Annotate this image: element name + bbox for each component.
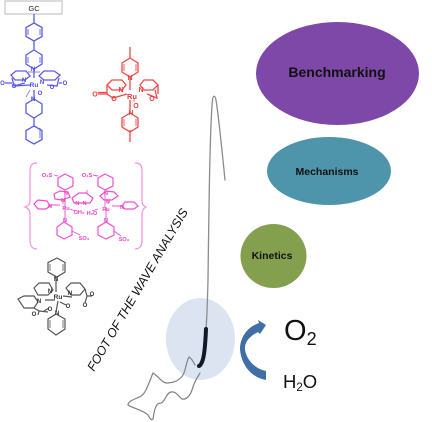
molecule: blue ruthenium complex: O <box>50 85 55 91</box>
molecule: pink dinuclear ruthenium complex: N <box>106 199 110 205</box>
molecule: pink dinuclear ruthenium complex: N <box>61 198 65 204</box>
molecule: pink dinuclear ruthenium complex: H₂O <box>87 211 98 217</box>
molecule: pink dinuclear ruthenium complex: N <box>64 191 68 197</box>
molecule: black ruthenium complex: O <box>66 304 71 310</box>
molecule: blue ruthenium complex: O <box>38 91 43 97</box>
molecule: red ruthenium complex: O <box>92 92 98 98</box>
molecule: blue ruthenium complex: O <box>12 84 17 90</box>
molecule: black ruthenium complex: O <box>48 307 53 313</box>
molecule: pink dinuclear ruthenium complex <box>25 163 146 249</box>
molecule: pink dinuclear ruthenium complex: N <box>48 204 52 210</box>
arrow: water to oxygen <box>240 320 266 380</box>
molecule: blue ruthenium complex: N <box>40 80 44 86</box>
molecule: black ruthenium complex: O <box>83 303 88 309</box>
molecule: pink dinuclear ruthenium complex: Ru <box>62 206 70 212</box>
molecule: pink dinuclear ruthenium complex: N <box>104 191 108 197</box>
ellipse: Kinetics <box>240 224 306 288</box>
molecule: pink dinuclear ruthenium complex: N <box>104 218 108 224</box>
molecule: pink dinuclear ruthenium complex: O₃S <box>42 173 53 179</box>
ellipse: Benchmarking: Benchmarking <box>288 64 386 80</box>
molecule: pink dinuclear ruthenium complex: N <box>63 218 67 224</box>
molecule: black ruthenium complex: N <box>55 311 59 317</box>
molecule: black ruthenium complex <box>18 258 95 335</box>
molecule: black ruthenium complex: N <box>48 289 52 295</box>
label: O2: 2 <box>307 329 317 349</box>
molecule: pink dinuclear ruthenium complex: Ru <box>102 207 110 213</box>
molecule: red ruthenium complex: O <box>149 96 155 103</box>
electrode box: GC <box>5 1 62 14</box>
molecule: black ruthenium complex: N <box>68 291 72 297</box>
molecule: red ruthenium complex: N <box>138 87 144 94</box>
molecule: red ruthenium complex: O <box>133 103 139 110</box>
ellipse: Benchmarking <box>256 22 419 125</box>
label: H2O: 2 <box>296 382 303 394</box>
molecule: blue ruthenium complex: Ru <box>30 82 38 89</box>
molecule: blue ruthenium complex: O <box>0 81 5 87</box>
label: H2O: O <box>303 371 317 392</box>
molecule: black ruthenium complex: N <box>37 299 41 305</box>
molecule: red ruthenium complex: N <box>127 75 133 82</box>
label: O2: O <box>284 315 307 347</box>
molecule: black ruthenium complex: Ru <box>54 294 62 301</box>
ellipse: Mechanisms <box>267 137 391 205</box>
molecule: red ruthenium complex <box>92 47 158 142</box>
molecule: pink dinuclear ruthenium complex: OH₂ <box>74 210 85 216</box>
molecule: pink dinuclear ruthenium complex: N−N <box>75 201 87 207</box>
molecule: blue ruthenium complex <box>0 14 68 144</box>
molecule: red ruthenium complex: N <box>118 87 124 94</box>
molecule: blue ruthenium complex: O <box>63 81 68 87</box>
molecule: blue ruthenium complex: N <box>31 67 35 73</box>
molecule: pink dinuclear ruthenium complex: N <box>120 205 124 211</box>
molecule: blue ruthenium complex: N <box>31 97 35 103</box>
electrode box: GC: GC <box>28 4 40 13</box>
molecule: blue ruthenium complex: N <box>22 78 26 84</box>
chart: voltammogram curve <box>128 96 225 420</box>
ellipse: Kinetics: Kinetics <box>252 250 293 262</box>
molecule: black ruthenium complex: O <box>32 312 37 318</box>
highlight ellipse: foot of the wave region <box>166 298 235 380</box>
ellipse: Mechanisms: Mechanisms <box>295 166 359 178</box>
molecule: black ruthenium complex: N <box>54 277 58 283</box>
molecule: pink dinuclear ruthenium complex: SO₃ <box>79 236 90 242</box>
molecule: pink dinuclear ruthenium complex: SO₃ <box>119 237 130 243</box>
molecule: red ruthenium complex: N <box>128 110 134 117</box>
molecule: red ruthenium complex: Ru <box>127 92 137 101</box>
molecule: red ruthenium complex: O <box>111 96 117 103</box>
label: foot of the wave analysis: FOOT OF THE WAVE ANALYSIS <box>85 206 191 374</box>
molecule: black ruthenium complex: O <box>90 292 95 298</box>
label: H2O: H <box>283 371 296 392</box>
molecule: pink dinuclear ruthenium complex: O₃S <box>82 173 93 179</box>
